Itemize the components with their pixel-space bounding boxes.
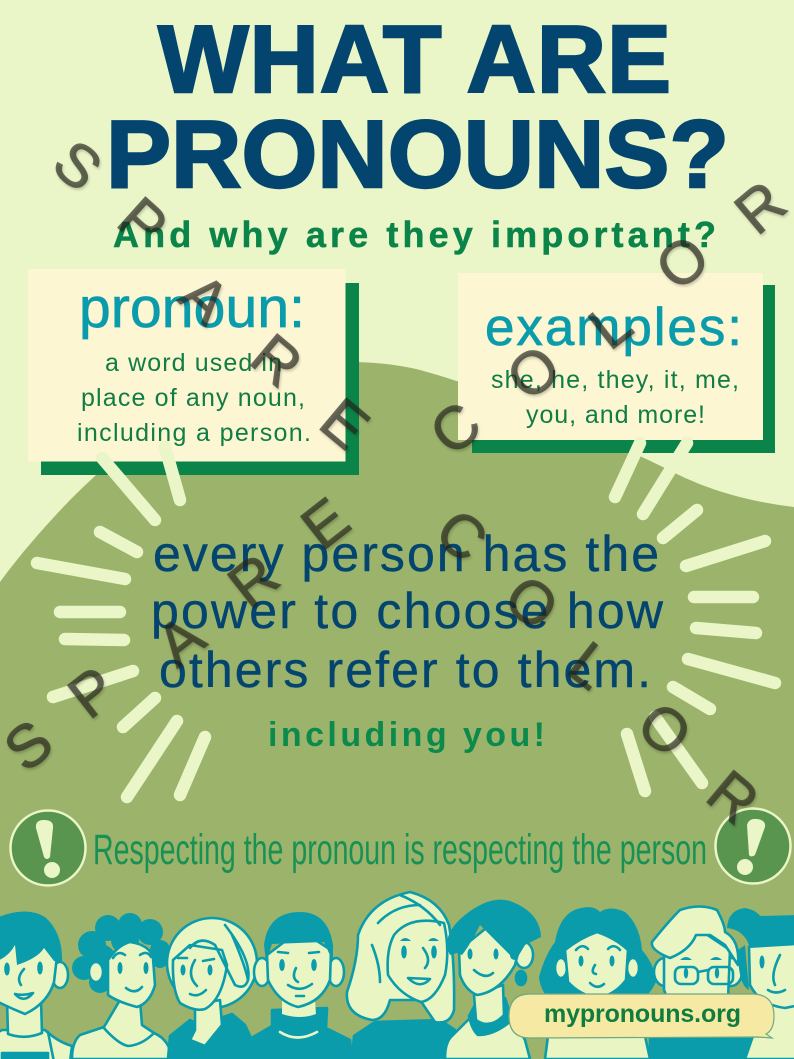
watermark: upper arc <box>41 127 794 468</box>
illustration: group of people <box>0 892 794 1059</box>
watermark: upper arc: R <box>239 321 315 400</box>
panel: pronoun definition: pronoun: <box>79 276 305 340</box>
title: PRONOUNS? <box>106 101 729 208</box>
background hill <box>0 362 794 1059</box>
watermark: upper arc: C <box>417 389 493 468</box>
watermark: lower arc: L <box>556 629 623 702</box>
watermark: upper arc: E <box>308 385 382 462</box>
watermark: lower arc: R <box>695 758 771 837</box>
person 1 <box>0 911 72 1059</box>
subtitle: And why are they important? <box>113 214 716 255</box>
panel: examples <box>458 273 775 453</box>
watermark: upper arc: O <box>643 222 722 303</box>
watermark: upper arc: O <box>494 332 573 413</box>
person 8 <box>650 906 762 1059</box>
watermark: upper arc: P <box>105 184 180 261</box>
panel: pronoun definition: including a person. <box>77 419 311 447</box>
person 6 <box>445 900 541 1059</box>
decorative rays <box>37 443 775 797</box>
panel: pronoun definition <box>28 269 359 475</box>
main message: power to choose how <box>151 583 664 639</box>
person 4 <box>248 912 352 1059</box>
main message: every person has the <box>153 526 659 582</box>
icon: left exclamation <box>10 810 86 886</box>
website pill: mypronouns.org <box>544 1000 741 1028</box>
panel: examples: she, he, they, it, me, <box>491 366 739 394</box>
person 3 <box>167 918 257 1059</box>
callout: including you: including you! <box>268 716 545 754</box>
watermark: lower arc: A <box>144 602 217 679</box>
watermark: upper arc: L <box>577 289 644 362</box>
panel: examples: you, and more! <box>526 401 705 429</box>
person 9 <box>727 908 794 1059</box>
panel: pronoun definition: a word used in <box>105 349 282 377</box>
person 2 <box>72 913 172 1059</box>
website pill <box>509 994 774 1038</box>
watermark: lower arc: O <box>492 562 571 643</box>
watermark: upper arc: A <box>167 260 242 337</box>
watermark: lower arc: C <box>424 496 500 575</box>
title: WHAT ARE <box>158 6 671 113</box>
watermark: lower arc: P <box>56 654 129 731</box>
main message: others refer to them. <box>159 642 651 698</box>
main message <box>151 526 664 698</box>
watermark: upper arc: S <box>41 127 115 204</box>
person 7 <box>539 907 656 1059</box>
watermark: lower arc: O <box>625 689 704 770</box>
panel: examples: examples: <box>485 298 742 357</box>
watermark: lower arc: R <box>216 541 291 620</box>
person 5 <box>347 892 462 1059</box>
watermark: lower arc: E <box>289 485 362 562</box>
watermark: lower arc <box>0 485 771 837</box>
panel: pronoun definition: place of any noun, <box>81 384 305 412</box>
title <box>106 6 729 208</box>
icon: right exclamation <box>716 808 790 884</box>
